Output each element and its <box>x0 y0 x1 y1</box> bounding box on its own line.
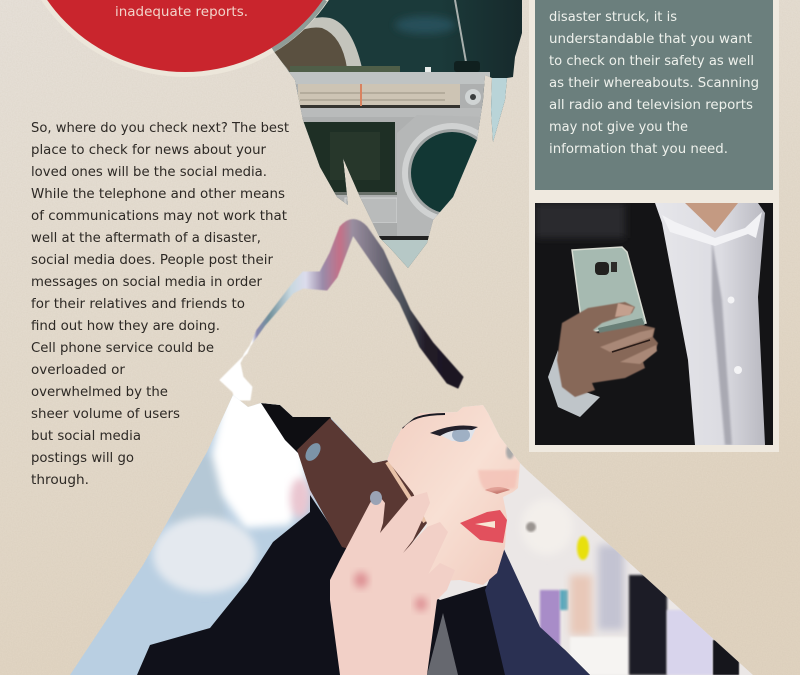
text block: social media advice: of communications may not work that <box>31 209 287 224</box>
panel: grey-green text block: all radio and television reports <box>549 98 753 113</box>
antenna <box>455 0 466 62</box>
text block: social media advice: for their relatives and friends to <box>31 297 245 312</box>
panel: grey-green text block: disaster struck, it is <box>549 10 677 25</box>
phone <box>572 247 646 333</box>
text block: social media advice: Cell phone service could be <box>31 341 214 356</box>
panel: grey-green text block: to check on their safety as well <box>549 54 754 69</box>
text block: social media advice: sheer volume of users <box>31 407 180 422</box>
callout: red circle with text: inadequate reports. <box>115 5 248 20</box>
panel: callout frame <box>529 0 779 452</box>
speaker <box>397 117 480 236</box>
text block: social media advice: place to check for news about your <box>31 143 267 158</box>
panel: grey-green text block <box>535 0 773 190</box>
text block: social media advice: postings will go <box>31 451 134 466</box>
phone <box>297 418 427 563</box>
lips <box>460 510 507 543</box>
text block: social media advice: find out how they are doing. <box>31 319 220 334</box>
text block: social media advice: So, where do you check next? The best <box>31 121 289 136</box>
text block: social media advice: overloaded or <box>31 363 126 378</box>
text block: social media advice: well at the aftermath of a disaster, <box>31 231 261 246</box>
shirt <box>655 203 765 445</box>
text block: social media advice: but social media <box>31 429 141 444</box>
blurred street background <box>60 390 760 675</box>
hand <box>330 492 455 675</box>
radio body <box>285 72 490 237</box>
tuning dial <box>298 84 460 106</box>
photo: man holding a smartphone <box>535 203 773 445</box>
text block: social media advice: overwhelmed by the <box>31 385 168 400</box>
text block: social media advice: messages on social media in order <box>31 275 263 290</box>
text block: social media advice: social media does. People post their <box>31 253 274 268</box>
base strip <box>378 236 433 240</box>
text block: social media advice: loved ones will be the social media. <box>31 165 267 180</box>
photo: retro radio silhouette <box>270 0 530 275</box>
text block: social media advice: through. <box>31 473 89 488</box>
cuff <box>548 350 600 417</box>
hand <box>557 302 658 397</box>
sweater <box>427 613 458 675</box>
panel: grey-green text block: understandable that you want <box>549 32 752 47</box>
neck <box>685 203 738 232</box>
text block: social media advice <box>31 121 289 488</box>
eye <box>430 425 514 459</box>
panel: grey-green text block: information that you need. <box>549 142 728 157</box>
hair and jacket <box>261 403 332 455</box>
callout: red circle with text <box>12 0 358 77</box>
panel: grey-green text block: may not give you the <box>549 120 688 135</box>
cassette door <box>303 122 395 192</box>
handle and grille <box>270 17 362 72</box>
photo: woman on phone in mountain silhouette <box>60 390 760 675</box>
face <box>387 405 520 585</box>
panel: grey-green text block: as their whereabouts. Scanning <box>549 76 759 91</box>
text block: social media advice: While the telephone and other means <box>31 187 285 202</box>
nose shadow <box>485 487 510 494</box>
side strap <box>491 78 507 142</box>
squiggle: mountain outline photo fragment <box>220 220 463 400</box>
